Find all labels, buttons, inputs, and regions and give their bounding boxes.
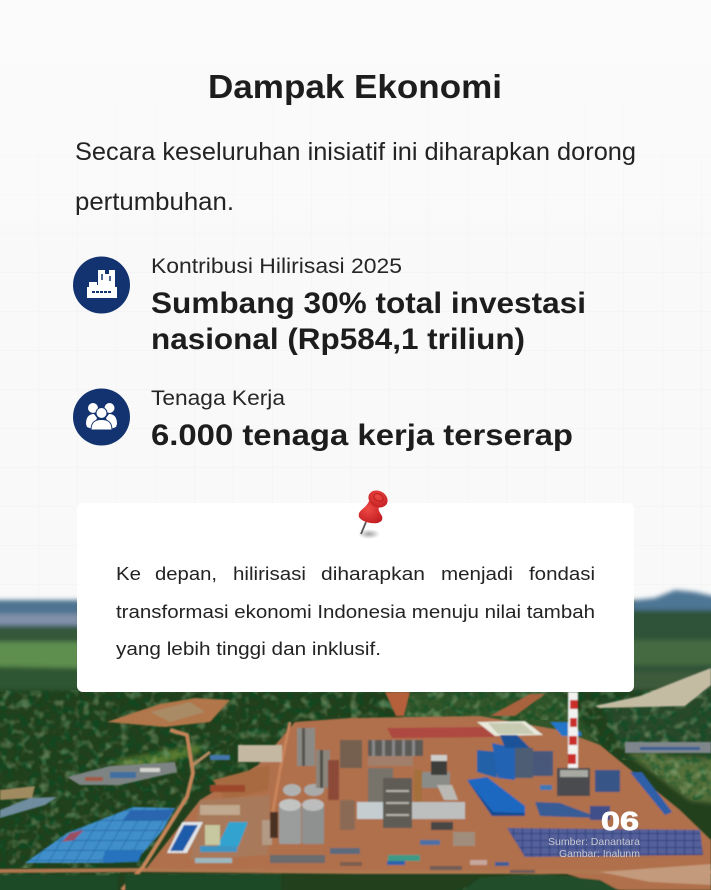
camps	[67, 762, 177, 785]
headline value: 6.000 tenaga kerja terserap	[151, 419, 573, 452]
label: Tenaga Kerja	[151, 387, 285, 410]
label: Kontribusi Hilirisasi 2025	[151, 255, 402, 278]
bottom forest	[0, 875, 118, 890]
clearing upper	[107, 698, 230, 727]
headline value	[151, 287, 586, 356]
icon: factory	[73, 256, 130, 314]
source credit: Gambar: Inalunm	[559, 848, 640, 860]
blue array field	[507, 828, 703, 857]
callout text: Ke	[116, 563, 141, 584]
callout text: yang lebih tinggi dan inklusif.	[116, 638, 381, 659]
aerial photo: industrial site	[0, 590, 711, 890]
furnace rows	[368, 740, 423, 756]
blue roof warehouse	[550, 722, 582, 736]
grey steel structures	[368, 768, 393, 802]
intro paragraph: Secara keseluruhan inisiatif ini diharapkan dorong	[75, 138, 636, 166]
item: investment contribution	[73, 255, 586, 356]
callout text: hilirisasi	[233, 563, 306, 584]
headline value: Sumbang 30% total investasi	[151, 287, 586, 320]
site soil	[145, 716, 711, 890]
callout text: diharapkan	[321, 563, 425, 584]
headline value: nasional (Rp584,1 triliun)	[151, 323, 525, 356]
blue power block	[477, 750, 498, 778]
icon: people	[73, 388, 130, 446]
source credit: Sumber: Danantara	[548, 836, 640, 848]
title: Dampak Ekonomi	[208, 68, 502, 105]
intro paragraph	[75, 138, 636, 216]
item: workforce	[73, 387, 573, 452]
silos	[270, 784, 324, 844]
intro paragraph: pertumbuhan.	[75, 188, 234, 216]
callout card	[77, 503, 634, 692]
white pond	[477, 721, 543, 736]
forest texture	[0, 690, 711, 890]
process towers	[297, 728, 315, 766]
yard clutter	[388, 855, 420, 861]
chimney	[568, 692, 578, 768]
callout text	[116, 563, 595, 659]
source credit	[548, 836, 640, 860]
red area	[387, 727, 500, 738]
callout text: fondasi	[529, 563, 595, 584]
boiler	[557, 768, 590, 796]
roads	[0, 870, 711, 872]
callout text: menjadi	[441, 563, 513, 584]
icon: red push pin	[358, 487, 391, 539]
callout text: depan,	[155, 563, 217, 584]
page number: 06	[601, 806, 639, 836]
blue roofs	[25, 807, 175, 863]
callout text: transformasi ekonomi Indonesia menuju nilai tambah	[116, 601, 595, 622]
